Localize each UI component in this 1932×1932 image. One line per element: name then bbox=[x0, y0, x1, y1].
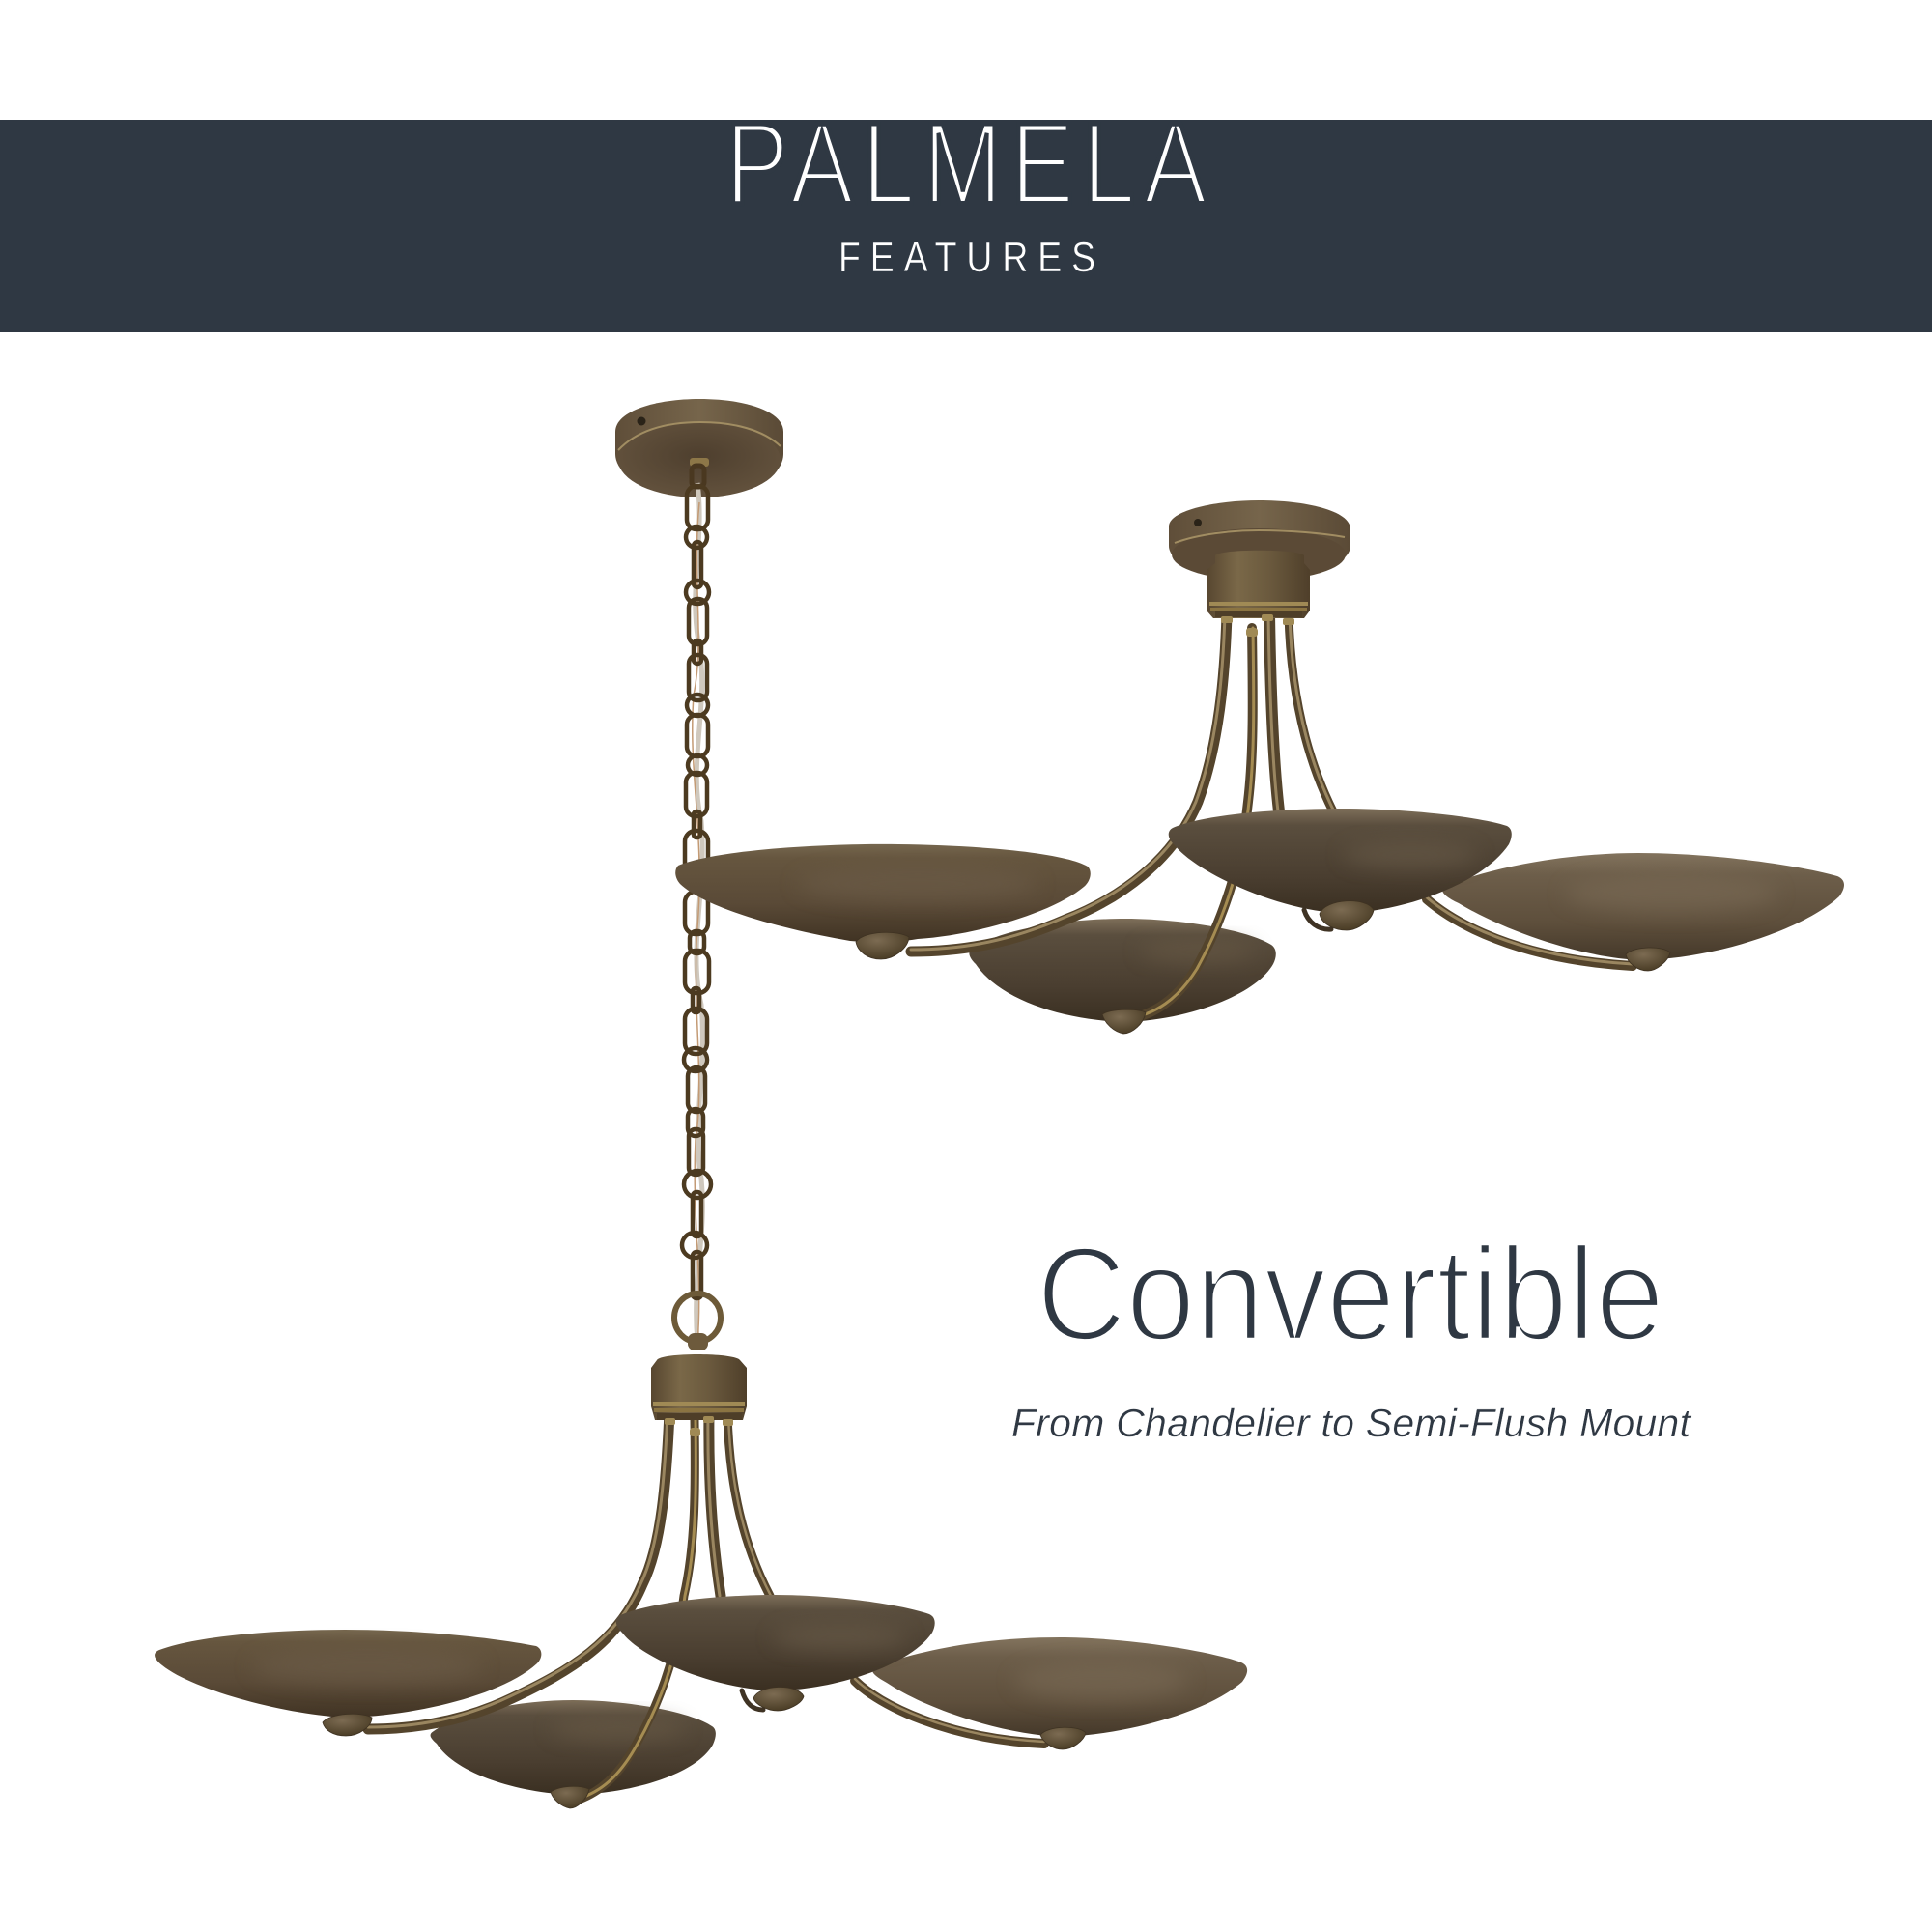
semi-flush housing bbox=[1207, 551, 1310, 637]
tagline: From Chandelier to Semi-Flush Mount bbox=[1011, 1401, 1692, 1445]
chandelier centre shade bbox=[616, 1595, 935, 1690]
chandelier arms bbox=[368, 1412, 1044, 1800]
large ring above chandelier housing bbox=[674, 1293, 721, 1342]
chandelier knobs bbox=[323, 1687, 1086, 1808]
chain of chandelier lamp bbox=[674, 458, 721, 1343]
semi-flush centre shade bbox=[1169, 809, 1512, 913]
semi-flush arms bbox=[911, 614, 1633, 1020]
subtitle: FEATURES: FEATURES bbox=[838, 233, 1095, 281]
chandelier right shade bbox=[872, 1637, 1247, 1737]
semi-flush right shade bbox=[1442, 853, 1844, 960]
chandelier left shade bbox=[155, 1630, 541, 1718]
semi-flush ceiling canopy bbox=[1169, 500, 1350, 582]
title: PALMELA: PALMELA bbox=[725, 99, 1208, 229]
semi-flush left shade bbox=[675, 844, 1091, 942]
heading: Convertible: Convertible bbox=[1037, 1220, 1664, 1369]
semi-flush lower-front shade bbox=[969, 919, 1276, 1022]
header band bbox=[0, 99, 1932, 332]
semi-flush knobs bbox=[856, 901, 1670, 1034]
chandelier lower-front shade bbox=[431, 1700, 716, 1795]
chandelier ceiling canopy bbox=[615, 399, 783, 497]
chandelier finial and housing bbox=[651, 1333, 747, 1436]
